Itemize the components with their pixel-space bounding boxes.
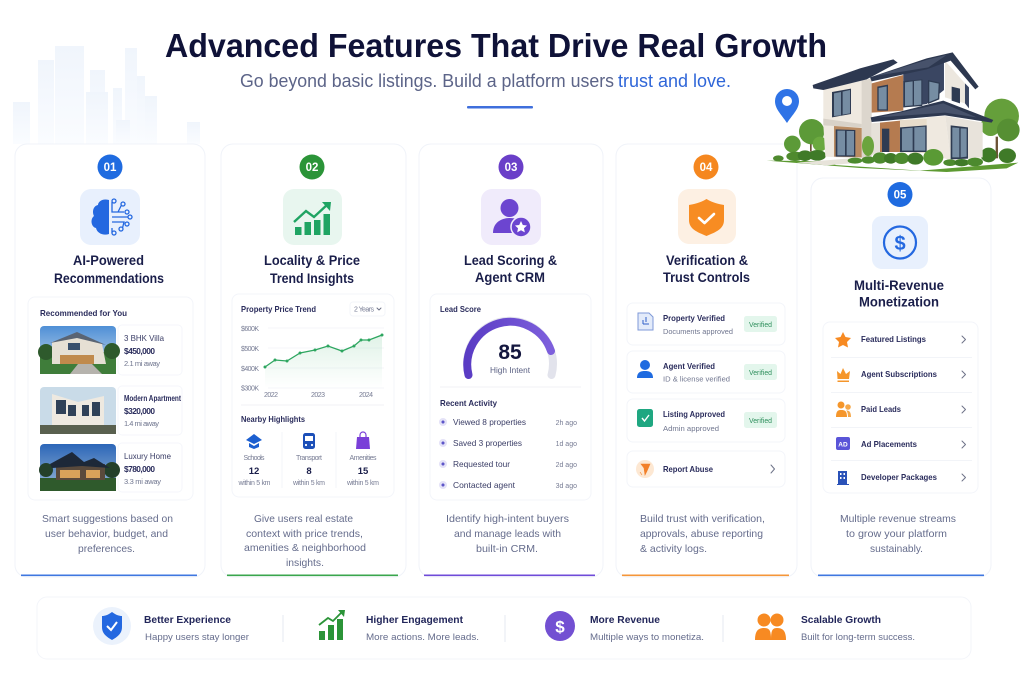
row: developer packages: Developer Packages [861,472,937,482]
highlight: amenities [346,432,379,487]
price trend and highlights panel [232,294,394,497]
line chart: $500K [241,346,259,353]
row: paid leads [836,402,966,417]
description: amenities & neighborhood [244,542,366,554]
description: Give users real estate [254,513,353,525]
row: developer packages [837,471,966,485]
subtitle: trust and love. [618,70,731,91]
description: Smart suggestions based on [42,513,173,525]
description: sustainably. [870,543,923,555]
heading [854,278,944,310]
row: listing approved: Admin approved [663,424,719,433]
row: agent verified: ID & license verified [663,374,730,384]
row: ad placements: Ad Placements [861,439,917,449]
benefit: scalable growth [755,614,915,643]
price trend and highlights panel: Property Price Trend [241,304,316,314]
badge 04 [694,154,718,180]
benefit: more revenue [545,611,704,643]
line chart: 2023 [311,392,325,399]
heading: Trend Insights [270,271,354,286]
recent activity list: Viewed 8 properties [453,417,526,427]
icon: orange shield [678,189,736,244]
row: featured listings: Featured Listings [861,334,926,344]
heading [663,253,750,285]
listing: 3 BHK Villa [38,325,182,375]
row: listing approved: Listing Approved [663,409,725,419]
highlight: transport: within 5 km [292,480,325,487]
highlight: amenities: Amenities [350,455,377,462]
icon: dollar [872,216,928,269]
recent activity list: 1d ago [556,441,577,448]
benefit: better experience [93,607,249,645]
row: agent subscriptions: Agent Subscriptions [861,369,937,379]
badge 02 [300,154,324,180]
benefit: scalable growth: Scalable Growth [801,614,881,626]
gauge 85 high intent: High Intent [490,365,531,375]
heading: Lead Scoring & [464,253,557,268]
row: property verified [627,303,785,345]
highlight: schools: within 5 km [238,480,271,487]
recent activity list: Saved 3 properties [453,438,522,448]
gauge 85 high intent [467,321,553,375]
benefit: scalable growth: Built for long-term success. [801,632,915,643]
house illustration [767,52,1020,172]
row: listing approved [627,399,785,442]
title: Advanced Features That Drive Real Growth [165,27,827,64]
row: property verified: Verified [749,320,772,329]
description: built-in CRM. [476,543,538,555]
right tree [981,99,1020,163]
highlight: transport [292,433,325,487]
period dropdown: 2 Years [354,306,374,314]
benefit: higher engagement: More actions. More leads. [366,632,479,643]
badge 01: 01 [104,162,117,174]
panel: card 1 AI-powered recommendations [15,144,205,577]
recent activity list: 2d ago [556,462,577,469]
description: preferences. [78,543,135,555]
roofs [813,59,898,90]
benefit: better experience: Better Experience [144,614,231,626]
lead score panel: Lead Score [440,304,481,314]
icon: AI brain [80,189,140,245]
listing: Modern Apartment [40,386,182,435]
row: property verified: Documents approved [663,327,733,336]
row: paid leads: Paid Leads [861,404,901,414]
benefit: more revenue: Multiple ways to monetiza. [590,632,704,643]
heading: AI-Powered [73,253,144,268]
heading: Locality & Price [264,253,360,268]
highlight: transport: Transport [296,455,322,462]
badge 03 [498,154,524,180]
badge 02: 02 [306,162,318,174]
description [840,513,956,555]
recommended list panel: Recommended for You [40,308,127,318]
listing: 3 BHK Villa: $450,000 [124,346,155,356]
recent activity list: 3d ago [556,483,577,490]
row: agent subscriptions [837,368,966,382]
panel: card 4 verification [616,144,797,577]
line chart: $400K [241,366,259,373]
line chart: $600K [241,326,259,333]
description: insights. [286,557,324,569]
description [640,513,765,555]
listing: Luxury Home: $780,000 [124,464,155,474]
badge 05: 05 [894,190,907,202]
lead score panel [430,294,591,500]
line chart: $300K [241,386,259,392]
description: Identify high-intent buyers [446,513,569,525]
icon: location pin [775,89,799,123]
listing: Modern Apartment: $320,000 [124,406,155,416]
recent activity list: Requested tour [453,459,510,469]
heading: Verification & [666,253,748,268]
benefit: more revenue: More Revenue [590,614,660,626]
title underline [467,106,533,108]
row: report abuse: Report Abuse [663,464,713,474]
panel: card 3 lead scoring [419,144,603,577]
benefit: higher engagement [319,610,479,643]
recent activity list [440,398,577,490]
badge 05 [888,182,912,207]
panel: card 2 locality and price trend [221,144,406,577]
recent activity list: 2h ago [556,420,577,427]
icon: agent with star [481,189,541,245]
description [42,513,173,555]
panel: card 5 monetization [811,178,991,577]
line chart: 2024 [359,392,373,399]
listing: Modern Apartment: 1.4 mi away [124,419,159,428]
highlight: schools: Schools [244,455,265,462]
heading [464,253,557,285]
row: property verified: Property Verified [663,313,725,323]
description: Multiple revenue streams [840,513,956,525]
listing: Luxury Home: Luxury Home [124,451,171,461]
benefit: higher engagement: Higher Engagement [366,614,463,626]
line chart [241,326,384,399]
heading: Multi-Revenue [854,278,944,293]
row: featured listings [835,332,966,348]
description: Build trust with verification, [640,513,765,525]
heading: Monetization [859,294,939,310]
icon: growth chart [283,189,342,245]
panel: benefits strip [37,597,971,659]
price trend and highlights panel: Nearby Highlights [241,414,305,424]
revenue list panel [823,322,978,493]
recent activity list: Contacted agent [453,480,516,490]
recommended list panel [28,297,193,500]
highlight: amenities: 15 [358,466,369,477]
description: approvals, abuse reporting [640,528,763,540]
badge 04: 04 [700,162,713,174]
heading: Recommendations [54,271,164,286]
subtitle: Go beyond basic listings. Build a platform users [240,70,614,91]
row: listing approved: Verified [749,416,772,425]
row: ad placements: AD [838,442,848,448]
benefit: better experience: Happy users stay longer [145,632,249,643]
row: agent verified: Agent Verified [663,361,715,371]
description: context with price trends, [246,528,363,540]
listing: 3 BHK Villa: 2.1 mi away [124,359,160,368]
description: to grow your platform [846,528,947,540]
row: report abuse [627,451,785,487]
highlight: schools: 12 [249,466,259,477]
listing: Luxury Home: 3.3 mi away [124,477,161,486]
gauge 85 high intent: 85 [498,341,522,364]
listing: 3 BHK Villa: 3 BHK Villa [124,333,164,343]
windows [832,79,968,159]
highlight: schools [238,434,271,487]
bushes [848,136,983,166]
walls [823,78,872,159]
period dropdown [350,302,385,316]
heading: Agent CRM [475,270,545,285]
description: user behavior, budget, and [45,528,168,540]
skyline background [13,46,200,144]
listing: Modern Apartment: Modern Apartment [124,393,181,403]
row: ad placements [836,437,966,450]
description: & activity logs. [640,543,707,555]
line chart: 2022 [264,392,278,399]
left trees [773,119,827,161]
row: agent verified: Verified [749,368,772,377]
benefit: more revenue: $ [555,618,565,636]
description [244,513,366,569]
icon: dollar: $ [894,233,906,255]
description [446,513,569,555]
recent activity list: Recent Activity [440,398,497,408]
badge 01 [98,154,122,180]
heading [264,253,360,286]
heading [54,253,164,286]
heading: Trust Controls [663,270,750,285]
badge 03: 03 [505,162,517,174]
highlight: transport: 8 [306,466,312,477]
highlight: amenities: within 5 km [346,480,379,487]
row: agent verified [627,351,785,393]
description: and manage leads with [454,528,561,540]
listing: Luxury Home [39,443,182,492]
lawn [767,161,1018,172]
